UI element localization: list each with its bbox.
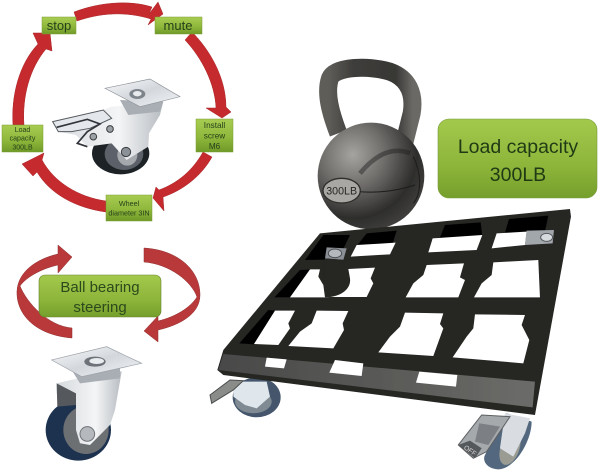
white cut-outs — [254, 232, 540, 363]
label: mute: mute — [164, 18, 192, 33]
front lip band — [218, 354, 535, 407]
callout: load capacity 300LB — [438, 119, 597, 198]
front right caster: OFF — [462, 444, 477, 458]
label: stop — [42, 17, 76, 34]
arrow: steering right — [144, 248, 200, 342]
callout: load capacity 300LB: 300LB — [490, 164, 546, 186]
label: mute — [155, 17, 202, 34]
label: ball bearing steering — [39, 275, 161, 317]
black inner shadow cut-outs — [239, 216, 548, 344]
icon: swivel caster wheel — [46, 347, 142, 461]
label: load capacity: 300LB — [12, 144, 33, 152]
icon: kettlebell 300LB — [318, 68, 424, 229]
label: install screw M6 — [196, 119, 233, 152]
label: wheel diameter: diameter 3IN — [108, 208, 150, 218]
icon: locking caster wheel — [53, 79, 180, 174]
arrow: wheel diameter to load capacity — [22, 153, 106, 212]
panel: ball bearing steering — [17, 245, 200, 461]
label: install screw M6: screw — [204, 132, 225, 140]
arrow: install screw to wheel diameter — [153, 152, 212, 211]
front slots — [265, 358, 457, 387]
label: ball bearing steering: Ball bearing — [60, 279, 140, 296]
label: stop: stop — [47, 18, 71, 33]
callout: load capacity 300LB: Load capacity — [458, 136, 578, 158]
rear caster mount plates — [324, 230, 554, 278]
arrow: load capacity to stop — [13, 33, 52, 125]
label: wheel diameter — [106, 195, 152, 221]
arrow: stop to mute — [74, 2, 163, 25]
icon: kettlebell 300LB: 300LB — [326, 186, 357, 198]
label: wheel diameter: Wheel — [119, 199, 140, 208]
arrow: steering left — [17, 245, 72, 338]
label: ball bearing steering: steering — [73, 299, 127, 316]
rear caster wheel — [317, 264, 351, 299]
label: load capacity: capacity — [10, 136, 36, 142]
label: install screw M6: Install — [204, 121, 225, 130]
label: load capacity — [2, 125, 43, 152]
front left caster — [210, 377, 281, 417]
front right caster — [458, 413, 532, 469]
label: load capacity: Load — [15, 127, 30, 134]
panel: feature cycle — [2, 2, 233, 221]
dolly top frame with cut-outs — [217, 209, 571, 415]
product: black caster dolly — [210, 209, 571, 469]
arrow: mute to install screw — [185, 32, 231, 118]
label: install screw M6: M6 — [209, 142, 221, 151]
